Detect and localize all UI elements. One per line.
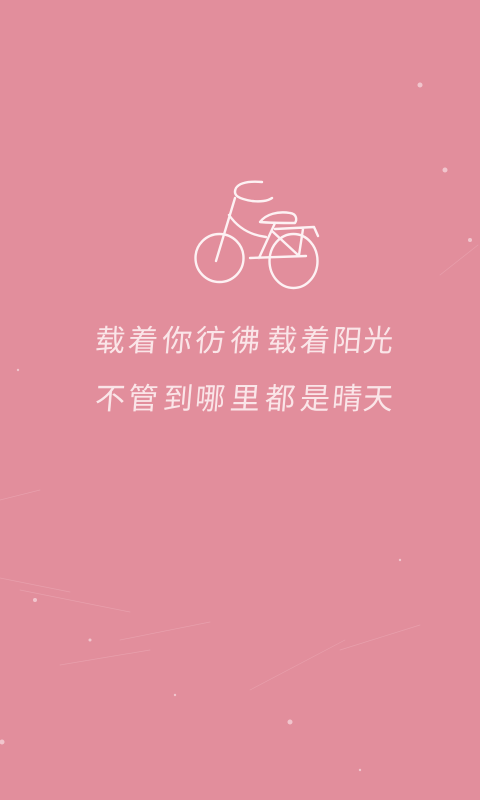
rear wheel <box>270 234 318 288</box>
curved top frame <box>229 215 266 237</box>
text line 2 <box>94 383 394 416</box>
text line 1: 载 <box>266 325 298 358</box>
text line 1: 载 <box>94 325 126 358</box>
steering stem and fork <box>216 198 235 261</box>
text line 2: 不 <box>94 383 126 416</box>
text line 1: 着 <box>127 325 159 358</box>
text line 2: 到 <box>162 383 194 416</box>
text line 2: 管 <box>127 383 159 416</box>
text line 1: 阳 <box>331 325 363 358</box>
text line 1: 彿 <box>229 325 261 358</box>
text line 1: 彷 <box>194 325 226 358</box>
handlebar <box>235 182 272 201</box>
text line 2: 晴 <box>331 383 363 416</box>
text line 2: 里 <box>229 383 261 416</box>
text line 2: 哪 <box>194 383 226 416</box>
text line 1: 你 <box>161 325 193 358</box>
frame tubes <box>250 223 318 258</box>
text line 1 <box>94 325 394 358</box>
text line 2: 都 <box>264 383 296 416</box>
front wheel <box>196 234 244 282</box>
text line 2: 天 <box>362 383 394 416</box>
saddle <box>260 212 296 223</box>
text line 1: 光 <box>362 325 394 358</box>
text line 1: 着 <box>299 325 331 358</box>
text line 2: 是 <box>299 383 331 416</box>
